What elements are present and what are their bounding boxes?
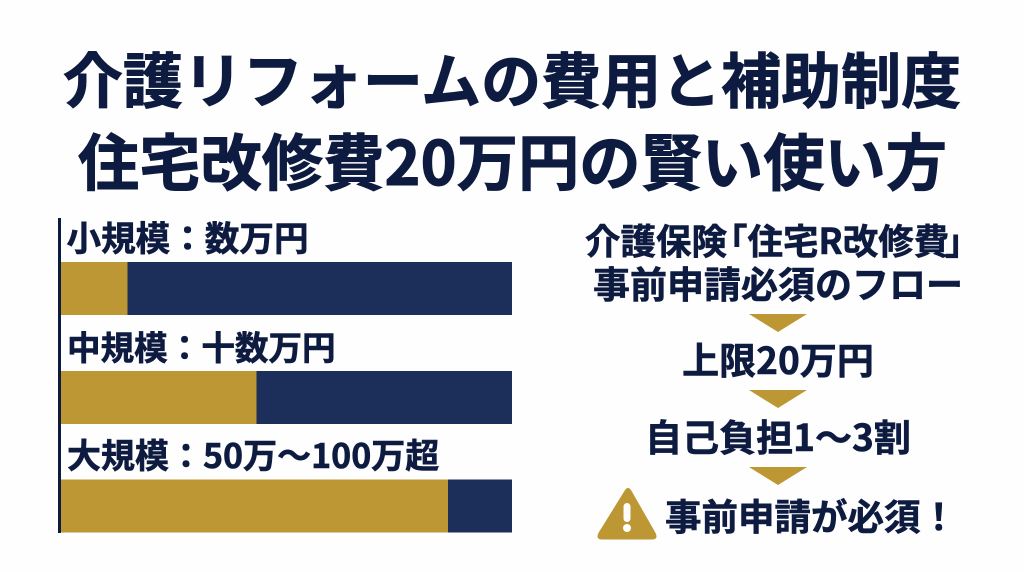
panel: cost bar chart (58, 211, 512, 533)
title: 介護リフォームの費用と補助制度 (63, 34, 961, 121)
step: prior application required: 事前申請が必須！ (665, 488, 957, 541)
flow heading: 介護保険 (585, 214, 728, 265)
medium scale row: 中規模：十数万円 (67, 321, 336, 370)
arrow 3 (749, 467, 807, 485)
step: upper limit: 上限20万円 (682, 331, 874, 385)
medium scale row (61, 321, 512, 424)
step: co-payment: 自己負担1～3割 (645, 408, 911, 462)
arrow 2 (749, 390, 807, 408)
large scale row (61, 429, 512, 532)
small scale row: 小規模：数万円 (66, 211, 309, 261)
title: 住宅改修費20万円の賢い使い方 (78, 114, 947, 203)
small scale row (61, 211, 512, 315)
panel: application flow (585, 214, 981, 541)
large scale row: 大規模：50万～100万超 (67, 429, 439, 478)
chart axis (58, 218, 61, 533)
flow heading: 住宅R改修費 (748, 214, 949, 265)
flow heading (585, 214, 981, 309)
arrow 1 (749, 314, 807, 332)
title (63, 34, 961, 203)
flow heading: 「 (712, 214, 748, 265)
icon: warning triangle (598, 488, 656, 539)
flow heading: 」 (945, 214, 981, 265)
flow heading: 事前申請必須のフロー (593, 255, 963, 309)
